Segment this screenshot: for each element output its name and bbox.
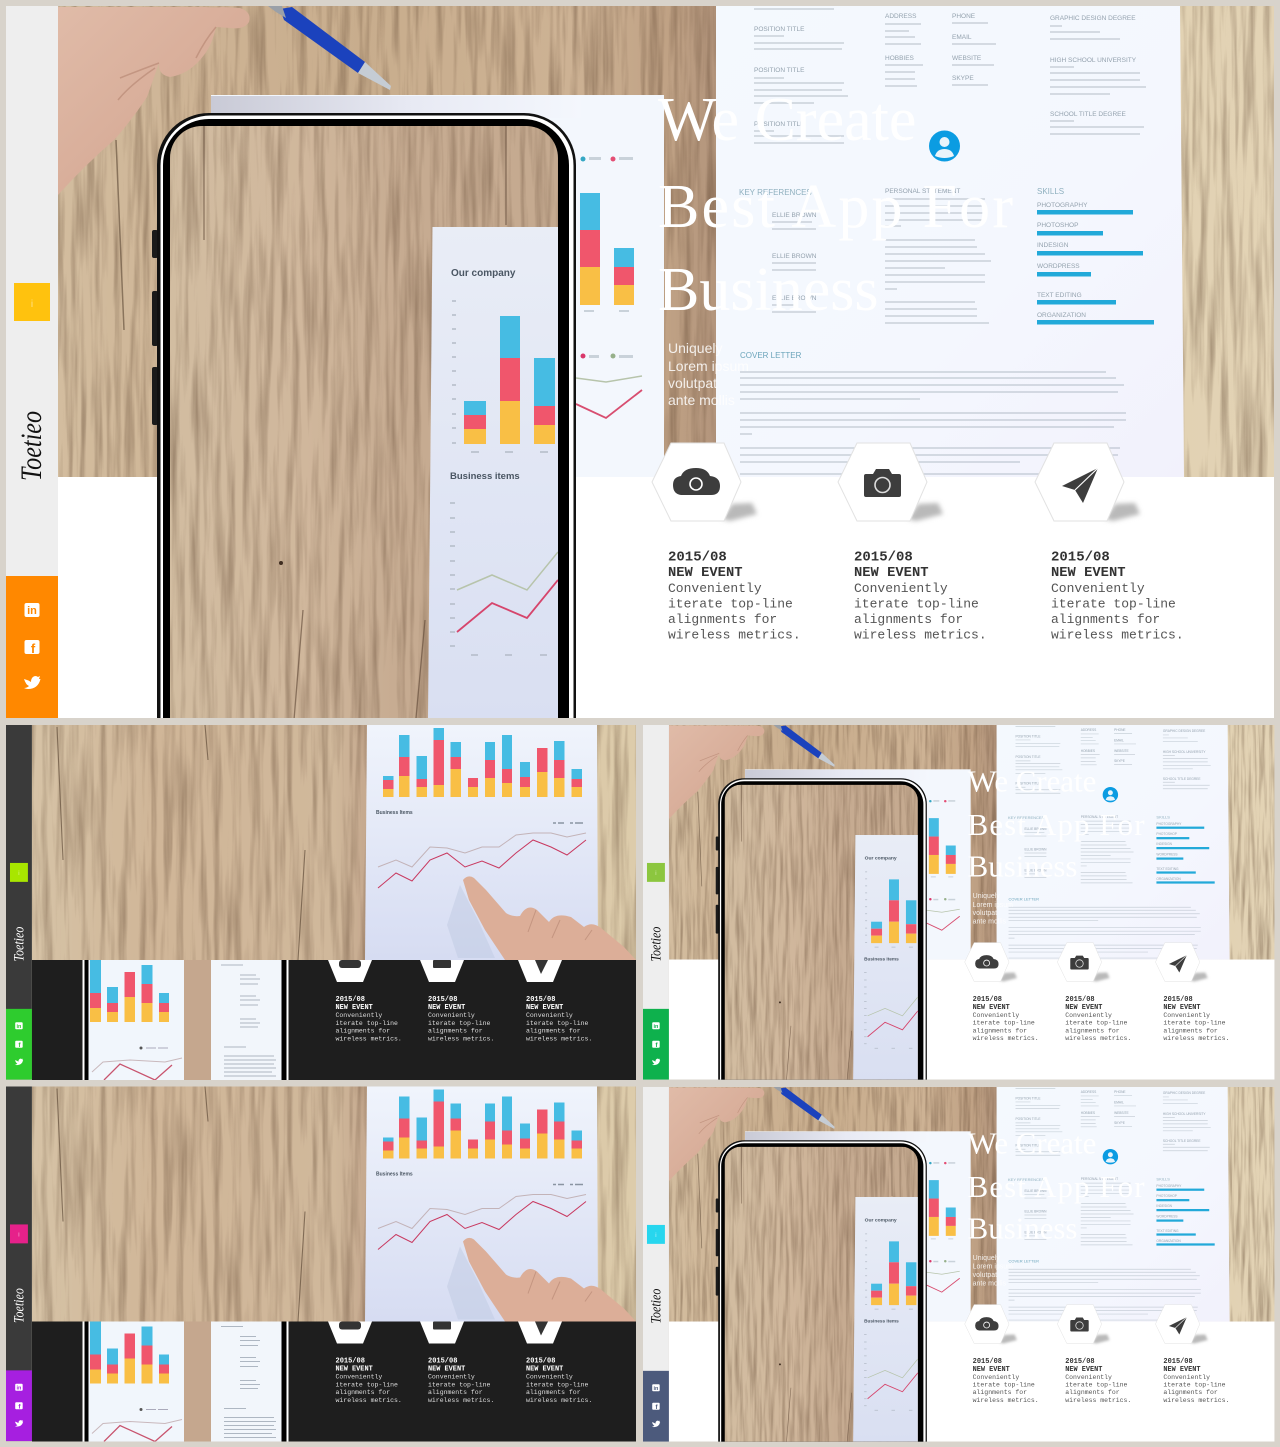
event column 2: 2015/08 (854, 550, 913, 566)
event columns white: Conveniently (336, 1374, 382, 1380)
event columns white: NEW EVENT (336, 1366, 373, 1374)
phone mockup (152, 113, 576, 819)
event columns: Conveniently (1163, 1374, 1210, 1381)
menu button (14, 283, 50, 321)
hero paragraph: Lorem ipsum (973, 1264, 1013, 1271)
event column 2 (854, 550, 987, 642)
hero title (968, 764, 1144, 883)
resume section headings: ADDRESS (885, 13, 917, 20)
panel: dark layout, lime and green (6, 725, 636, 1080)
side buttons (152, 230, 158, 425)
sidebar: dark, lime and green: i (18, 871, 20, 877)
event columns white: wireless metrics. (336, 1036, 402, 1042)
paper: resume: SKILLS (1037, 187, 1064, 196)
hero paragraph: Uniquely (668, 340, 722, 356)
event columns white: NEW EVENT (428, 1366, 465, 1374)
hero title: Best App For (968, 807, 1144, 842)
event columns white: iterate top-line (526, 1020, 589, 1027)
sidebar: green variant (643, 725, 669, 1080)
sidebar: dark, lime and green: f (18, 1042, 21, 1049)
hero paragraph: Uniquely (973, 1255, 1000, 1262)
hero paragraph (973, 1255, 1013, 1288)
hero paragraph: Uniquely (973, 893, 1000, 900)
phone screen wood (170, 126, 558, 766)
event columns: NEW EVENT (973, 1004, 1010, 1012)
hexagon: camera icon (838, 443, 943, 521)
resume section headings: POSITION TITLE (754, 121, 805, 128)
hero paragraph (973, 893, 1013, 926)
sidebar: dark, lime and green: in (17, 1024, 21, 1030)
icon: facebook: f (31, 641, 36, 656)
hexagon: paper plane icon (1035, 443, 1140, 521)
event columns white: Conveniently (336, 1012, 382, 1019)
hero title: Best App For (658, 173, 1013, 241)
event columns white: Conveniently (526, 1374, 573, 1380)
event column 2: Conveniently (854, 581, 948, 596)
paper: business charts: Business Items (376, 810, 413, 816)
scene: dark layout artwork copy (32, 1086, 636, 1442)
resume section headings: ORGANIZATION (1037, 312, 1086, 319)
event columns white: iterate top-line (336, 1382, 398, 1388)
event columns white: NEW EVENT (336, 1004, 373, 1012)
sidebar: dark, magenta and purple: Toetieo (11, 1288, 27, 1323)
event columns white: iterate top-line (428, 1020, 491, 1027)
menu button: i (31, 299, 33, 310)
paper: resume: COVER LETTER (740, 351, 802, 360)
paper: resume: KEY REFERENCES (739, 188, 812, 197)
resume section headings: POSITION TITLE (754, 67, 805, 74)
event columns white: alignments for (428, 1389, 483, 1396)
event column 1: alignments for (668, 612, 777, 627)
event columns: 2015/08 (1065, 996, 1095, 1004)
event column 2: wireless metrics. (854, 628, 987, 642)
wood tabletop (32, 725, 636, 960)
event columns: Conveniently (973, 1374, 1019, 1381)
event columns: wireless metrics. (1163, 1397, 1229, 1404)
event column 3: 2015/08 (1051, 550, 1110, 566)
sidebar: dark, magenta and purple: in (17, 1385, 21, 1391)
event column 3: NEW EVENT (1051, 566, 1126, 581)
resume section headings: WORDPRESS (1037, 263, 1080, 270)
resume section headings: EMAIL (952, 34, 972, 41)
resume section headings: HIGH SCHOOL UNIVERSITY (1050, 57, 1137, 64)
line chart (378, 833, 586, 888)
event columns white: NEW EVENT (526, 1366, 563, 1374)
paper: business charts (365, 725, 636, 960)
wood tabletop (58, 6, 1274, 477)
event columns: iterate top-line (973, 1382, 1035, 1389)
event column 3: alignments for (1051, 612, 1160, 627)
sidebar: green variant: f (655, 1042, 658, 1049)
event columns: Conveniently (1163, 1012, 1210, 1019)
event column 3: iterate top-line (1051, 596, 1176, 612)
sidebar: green variant: Toetieo (648, 926, 664, 962)
sidebar: cyan variant: i (655, 1233, 657, 1239)
event columns: wireless metrics. (1065, 1035, 1131, 1042)
event columns white: wireless metrics. (526, 1036, 592, 1042)
event columns: iterate top-line (1163, 1382, 1226, 1389)
event columns white: 2015/08 (428, 996, 457, 1004)
resume section headings: ELLIE BROWN (772, 212, 817, 219)
event columns white: iterate top-line (428, 1382, 491, 1388)
event columns white: iterate top-line (336, 1020, 398, 1027)
scene: light layout artwork copy (669, 725, 1274, 1130)
event columns white: alignments for (526, 1028, 581, 1034)
event columns white: alignments for (336, 1389, 390, 1396)
event column 1: 2015/08 (668, 550, 727, 566)
event columns: iterate top-line (1065, 1382, 1128, 1389)
hero title: Business (968, 848, 1077, 883)
event column 1 (668, 550, 801, 642)
sidebar: cyan variant: in (654, 1386, 658, 1392)
sidebar: dark, magenta and purple (6, 1086, 32, 1441)
event columns: Conveniently (973, 1012, 1019, 1019)
event columns: NEW EVENT (1065, 1004, 1102, 1012)
icon: twitter (24, 676, 40, 689)
logo: Toetieo (15, 411, 48, 481)
event columns: alignments for (973, 1389, 1027, 1396)
event column 1: wireless metrics. (668, 628, 801, 642)
event column 1: NEW EVENT (668, 566, 743, 581)
phone paper: resume (211, 960, 282, 1080)
hero paragraph: ante mollis (668, 392, 735, 408)
sidebar: green variant: in (654, 1024, 658, 1030)
resume section headings: INDESIGN (1037, 242, 1069, 249)
event columns: iterate top-line (1163, 1020, 1226, 1027)
event columns: iterate top-line (1065, 1020, 1128, 1027)
event columns: iterate top-line (973, 1020, 1035, 1027)
event columns: 2015/08 (973, 996, 1002, 1004)
event columns white: wireless metrics. (526, 1397, 592, 1404)
resume section headings: PHOTOGRAPHY (1037, 202, 1088, 209)
event columns: alignments for (1163, 1027, 1218, 1034)
hero paragraph: Lorem ipsum (973, 902, 1013, 909)
hero paragraph: ante mollis (973, 919, 1006, 926)
event columns: 2015/08 (1163, 1358, 1193, 1366)
hero title: We Create (658, 86, 916, 154)
event columns white: 2015/08 (428, 1358, 457, 1366)
scene: light layout artwork copy (669, 1087, 1274, 1447)
event columns: NEW EVENT (973, 1366, 1010, 1374)
event columns white: Conveniently (428, 1012, 475, 1019)
hero title: Business (658, 256, 878, 324)
event columns: wireless metrics. (1065, 1397, 1131, 1404)
phone inner paper: our company: Business items (450, 471, 520, 482)
hero title: Best App For (968, 1169, 1144, 1204)
resume section headings: HOBBIES (885, 55, 915, 62)
event column 1: iterate top-line (668, 596, 793, 612)
event columns white: NEW EVENT (428, 1004, 465, 1012)
hero title: Business (968, 1210, 1077, 1245)
event columns: alignments for (1065, 1389, 1120, 1396)
event column 3: Conveniently (1051, 581, 1145, 596)
event columns: 2015/08 (1065, 1358, 1095, 1366)
hero title: We Create (968, 1126, 1096, 1161)
hero paragraph: volutpat (973, 1272, 997, 1279)
phone paper: bar chart (88, 960, 184, 1080)
event columns white: 2015/08 (526, 996, 555, 1004)
scene: dark layout artwork (32, 725, 636, 1080)
hero title (658, 86, 1013, 324)
event columns: alignments for (1065, 1027, 1120, 1034)
resume section headings: POSITION TITLE (754, 26, 805, 33)
event columns white: 2015/08 (526, 1358, 555, 1366)
hero paragraph: Lorem ipsum (668, 358, 749, 374)
event columns white: wireless metrics. (336, 1397, 402, 1404)
event columns: 2015/08 (973, 1358, 1002, 1366)
event columns white: Conveniently (526, 1012, 573, 1019)
event columns white: alignments for (428, 1028, 483, 1034)
event columns (973, 1358, 1229, 1404)
event columns white: wireless metrics. (428, 1397, 494, 1404)
event columns: wireless metrics. (1163, 1035, 1229, 1042)
event column 3 (1051, 550, 1184, 642)
sidebar: dark, lime and green: Toetieo (11, 926, 27, 962)
event columns (973, 996, 1229, 1042)
hand pointing (447, 876, 636, 960)
resume section headings: SCHOOL TITLE DEGREE (1050, 111, 1127, 118)
resume section headings: TEXT EDITING (1037, 292, 1082, 299)
sidebar: cyan variant: f (655, 1404, 658, 1411)
event columns white: wireless metrics. (428, 1036, 494, 1042)
resume section headings: ELLIE BROWN (772, 253, 817, 260)
paper: business charts (211, 95, 664, 477)
event columns white (336, 996, 592, 1042)
sidebar: cyan variant (643, 1087, 669, 1442)
resume section headings (754, 13, 1137, 319)
sidebar: dark, magenta and purple: i (18, 1232, 20, 1238)
social block (6, 576, 58, 718)
sidebar: green variant: i (655, 871, 657, 877)
blue pen (268, 6, 391, 90)
event columns white: 2015/08 (336, 1358, 365, 1366)
panel: small light layout, green (643, 725, 1274, 1130)
event column 1: Conveniently (668, 581, 762, 596)
resume section headings: ELLIE BROWN (772, 295, 817, 302)
resume section headings: PHOTOSHOP (1037, 222, 1078, 229)
avatar (929, 130, 960, 162)
phone inner paper: our company (428, 227, 558, 718)
hero paragraph: volutpat (973, 910, 997, 917)
event columns white: Conveniently (428, 1374, 475, 1380)
resume section headings: PHONE (952, 13, 976, 20)
skill bars (1037, 210, 1154, 324)
event columns: 2015/08 (1163, 996, 1193, 1004)
event columns white: NEW EVENT (526, 1004, 563, 1012)
sidebar: dark, magenta and purple: f (18, 1404, 21, 1411)
scene: light layout artwork (58, 6, 1274, 819)
hand holding pen (58, 7, 250, 195)
hero paragraph: volutpat (668, 375, 717, 391)
event columns white (336, 1358, 592, 1404)
hexagon tabs (328, 960, 562, 982)
stacked bar chart (383, 728, 582, 797)
event columns: alignments for (973, 1027, 1027, 1034)
event column 2: alignments for (854, 612, 963, 627)
event columns: wireless metrics. (973, 1397, 1039, 1404)
event columns: alignments for (1163, 1389, 1218, 1396)
event columns: wireless metrics. (973, 1035, 1039, 1042)
phone inner paper: our company: Our company (451, 268, 516, 279)
event columns: Conveniently (1065, 1374, 1112, 1381)
event columns: NEW EVENT (1163, 1366, 1200, 1374)
white lower area (58, 477, 1274, 718)
event columns white: iterate top-line (526, 1382, 589, 1388)
panel: main light layout (6, 6, 1274, 718)
resume section headings: WEBSITE (952, 55, 982, 62)
icon: facebook (24, 640, 40, 656)
sidebar: cyan variant: Toetieo (648, 1288, 664, 1324)
event columns white: alignments for (526, 1389, 581, 1396)
sidebar: logo and social icons (6, 6, 58, 718)
event columns: Conveniently (1065, 1012, 1112, 1019)
resume section headings: PERSONAL STATEMENT (885, 188, 960, 195)
event columns white: alignments for (336, 1028, 390, 1034)
dark lower band (32, 960, 636, 1080)
event columns: NEW EVENT (1065, 1366, 1102, 1374)
hexagon: cloud icon (652, 443, 757, 521)
resume section headings: SKYPE (952, 75, 974, 82)
sidebar: dark, lime and green (6, 725, 32, 1080)
panel: dark layout, magenta and purple (6, 1086, 636, 1442)
event columns: NEW EVENT (1163, 1004, 1200, 1012)
icon: linkedin: in (27, 605, 37, 617)
event column 2: iterate top-line (854, 596, 979, 612)
phone mockup cropped (82, 960, 288, 1080)
event columns white: 2015/08 (336, 996, 365, 1004)
panel: small light layout, cyan and slate (643, 1087, 1274, 1447)
hero paragraph: ante mollis (973, 1281, 1006, 1288)
paper: resume (716, 6, 1184, 477)
icon: linkedin (24, 603, 40, 617)
hero paragraph (668, 340, 749, 408)
hero title: We Create (968, 764, 1096, 799)
hero title (968, 1126, 1144, 1245)
resume section headings: GRAPHIC DESIGN DEGREE (1050, 15, 1136, 22)
event column 3: wireless metrics. (1051, 628, 1184, 642)
event column 2: NEW EVENT (854, 566, 929, 581)
